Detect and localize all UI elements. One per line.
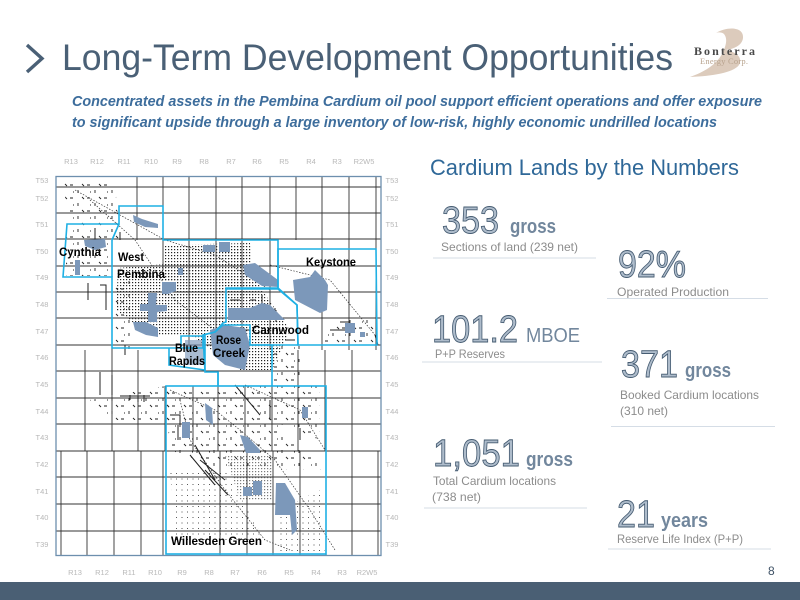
- township labels right: T50: [386, 247, 398, 256]
- subtitle: Concentrated assets in the Pembina Cardium oil pool support efficient operations and offer exposure: [72, 93, 762, 110]
- field labels: Rapids: [169, 354, 205, 368]
- stat: 92%: [607, 244, 768, 299]
- logo: Bonterra Energy Corp.: Bonterra: [694, 44, 755, 58]
- stat: 371 gross: [611, 344, 775, 426]
- township labels right: T43: [386, 433, 398, 442]
- range labels bottom: R7: [230, 568, 240, 577]
- township labels left: T50: [36, 247, 48, 256]
- range labels bottom: [68, 568, 377, 577]
- range labels bottom: R8: [204, 568, 214, 577]
- township labels left: T45: [36, 380, 48, 389]
- icon: title chevron: [27, 45, 42, 72]
- range labels top: R4: [306, 157, 316, 166]
- stat: 371 gross: (310 net): [620, 404, 668, 418]
- township labels right: T52: [386, 194, 398, 203]
- frame: [56, 176, 381, 556]
- producing land patches: [75, 215, 365, 535]
- township labels right: T45: [386, 380, 398, 389]
- field labels: Rose: [216, 333, 241, 347]
- range labels top: R3: [332, 157, 342, 166]
- township labels right: T39: [386, 540, 398, 549]
- range labels top: [64, 157, 374, 166]
- range labels bottom: R5: [284, 568, 294, 577]
- range labels top: R13: [64, 157, 78, 166]
- township labels right: [386, 176, 398, 549]
- stat: 21 years: 21: [617, 494, 655, 536]
- range labels bottom: R11: [122, 568, 136, 577]
- range labels top: R6: [252, 157, 262, 166]
- township labels left: T49: [36, 273, 48, 282]
- township labels right: T41: [386, 487, 398, 496]
- township labels left: T43: [36, 433, 48, 442]
- township labels right: T51: [386, 220, 398, 229]
- field labels: West: [118, 250, 144, 264]
- subtitle: to significant upside through a large inventory of low-risk, highly economic undrilled locations: [72, 114, 717, 131]
- range labels top: R10: [144, 157, 158, 166]
- township labels right: T46: [386, 353, 398, 362]
- range labels top: R7: [226, 157, 236, 166]
- township labels left: T47: [36, 327, 48, 336]
- stat: 1,051 gross: [424, 433, 587, 508]
- range labels bottom: R2W5: [357, 568, 377, 577]
- range labels bottom: R6: [257, 568, 267, 577]
- range labels bottom: R10: [148, 568, 162, 577]
- field labels: Carnwood: [252, 323, 309, 337]
- stat: 92%: Operated Production: [617, 285, 729, 299]
- field labels: [59, 245, 356, 548]
- stat: 371 gross: Booked Cardium locations: [620, 388, 759, 402]
- logo: Bonterra Energy Corp.: [690, 29, 755, 77]
- stat: 1,051 gross: Total Cardium locations: [433, 474, 556, 488]
- lease block outlines: [63, 206, 377, 554]
- title: Long-Term Development Opportunities: [62, 37, 673, 78]
- stat: 1,051 gross: (738 net): [432, 490, 481, 504]
- township labels right: T42: [386, 460, 398, 469]
- township labels left: T48: [36, 300, 48, 309]
- range labels bottom: R3: [337, 568, 347, 577]
- stat: 353 gross: Sections of land (239 net): [441, 240, 578, 254]
- field labels: Cynthia: [59, 245, 101, 259]
- range labels bottom: R13: [68, 568, 82, 577]
- footer bar: [0, 582, 800, 600]
- field labels: Blue: [175, 341, 198, 355]
- heading: Cardium Lands by the Numbers: Cardium Lands by the Numbers: [430, 155, 739, 180]
- range labels bottom: R12: [95, 568, 109, 577]
- stat: 371 gross: gross: [685, 360, 731, 382]
- range labels top: R5: [279, 157, 289, 166]
- stat: 101.2 MBOE: P+P Reserves: [435, 347, 505, 361]
- range labels top: R8: [199, 157, 209, 166]
- range labels bottom: R4: [311, 568, 321, 577]
- stipple areas: [62, 180, 375, 552]
- range labels bottom: R9: [177, 568, 187, 577]
- township labels left: [36, 176, 48, 549]
- stat: 21 years: years: [661, 510, 708, 532]
- stat: 1,051 gross: 1,051: [433, 433, 520, 475]
- township labels right: T49: [386, 273, 398, 282]
- stat: 371 gross: 371: [621, 344, 678, 386]
- stat: 101.2 MBOE: MBOE: [526, 325, 580, 347]
- map: Pembina Cardium land map: [36, 157, 398, 577]
- township labels left: T42: [36, 460, 48, 469]
- range labels top: R9: [172, 157, 182, 166]
- township labels right: T53: [386, 176, 398, 185]
- stat: 353 gross: 353: [442, 200, 499, 242]
- township labels left: T52: [36, 194, 48, 203]
- stat: 353 gross: gross: [510, 216, 556, 238]
- township labels left: T53: [36, 176, 48, 185]
- township labels left: T44: [36, 407, 48, 416]
- stat: 92%: 92%: [618, 244, 686, 286]
- stat: 21 years: Reserve Life Index (P+P): [617, 532, 743, 546]
- range labels top: R2W5: [354, 157, 374, 166]
- stat: 101.2 MBOE: [422, 309, 602, 362]
- township labels right: T48: [386, 300, 398, 309]
- township labels left: T51: [36, 220, 48, 229]
- lease fragments: [88, 228, 378, 495]
- subtitle: [72, 93, 762, 131]
- township labels right: T47: [386, 327, 398, 336]
- township labels right: T40: [386, 513, 398, 522]
- stat: 21 years: [608, 494, 771, 549]
- stat: 1,051 gross: gross: [526, 449, 573, 471]
- oil pool trace lines: [75, 190, 375, 550]
- range labels top: R12: [90, 157, 104, 166]
- field labels: Pembina: [117, 267, 165, 281]
- stat: 101.2 MBOE: 101.2: [432, 309, 518, 351]
- logo: Bonterra Energy Corp.: Energy Corp.: [700, 56, 748, 66]
- range labels top: R11: [117, 157, 131, 166]
- field labels: Creek: [213, 346, 245, 360]
- township labels left: T40: [36, 513, 48, 522]
- township labels right: T44: [386, 407, 398, 416]
- township labels left: T41: [36, 487, 48, 496]
- township grid: [56, 176, 381, 556]
- field labels: Keystone: [306, 255, 356, 269]
- page number: 8: [768, 564, 775, 578]
- township labels left: T46: [36, 353, 48, 362]
- stat: 353 gross: [433, 200, 596, 258]
- field labels: Willesden Green: [171, 534, 262, 548]
- township labels left: T39: [36, 540, 48, 549]
